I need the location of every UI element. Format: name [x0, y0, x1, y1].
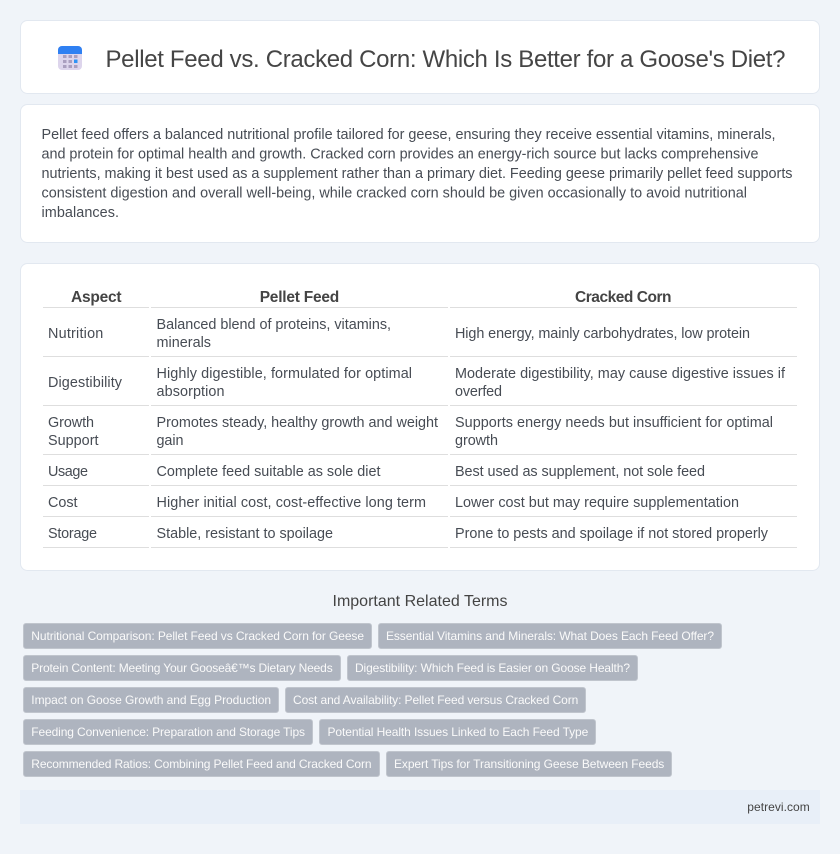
heading: important related terms: Important Related Terms — [332, 593, 508, 610]
table row: nutrition: Balanced blend of proteins, vitamins, — [156, 317, 391, 333]
tag: Impact on Goose Growth and Egg Production — [31, 693, 271, 707]
table header row: Pellet Feed — [260, 289, 339, 306]
table row: nutrition: minerals — [156, 335, 211, 351]
table row: usage: Best used as supplement, not sole feed — [455, 464, 705, 480]
panel: summary paragraph — [20, 104, 820, 242]
table row: growth support: Support — [48, 433, 98, 449]
table row: storage: Prone to pests and spoilage if not stored properly — [455, 526, 769, 542]
title: Pellet Feed vs. Cracked Corn: Which Is Better for a Goose's Diet? — [106, 46, 786, 73]
tag: Nutritional Comparison: Pellet Feed vs Cracked Corn for Geese — [31, 629, 364, 643]
tag: Cost and Availability: Pellet Feed versus Cracked Corn — [293, 693, 578, 707]
tag: Recommended Ratios: Combining Pellet Feed and Cracked Corn — [31, 757, 372, 771]
table row: usage: Complete feed suitable as sole diet — [156, 464, 380, 480]
text block: summary: imbalances. — [42, 205, 119, 221]
table row: digestibility: Moderate digestibility, may cause digestive issues if — [455, 366, 786, 382]
footer — [20, 790, 820, 824]
panel: header — [20, 20, 820, 94]
tag: Feeding Convenience: Preparation and Storage Tips — [31, 725, 305, 739]
table row: cost: Cost — [48, 495, 78, 511]
table row: cost: Lower cost but may require supplementation — [455, 495, 739, 511]
tag — [24, 720, 312, 744]
table row: growth support: Promotes steady, healthy growth and weight — [156, 415, 438, 431]
panel: related term tags — [24, 624, 722, 776]
table row: cost: Higher initial cost, cost-effective long term — [156, 495, 426, 511]
table row: storage: Stable, resistant to spoilage — [156, 526, 333, 542]
text block: summary: Pellet feed offers a balanced nutritional profile tailored for geese, ensuring they receive essential vitamins, minerals, — [42, 127, 776, 143]
tag — [24, 688, 278, 712]
table row: digestibility: overfed — [455, 384, 502, 400]
tag — [386, 752, 672, 776]
table row: usage: Usage — [48, 464, 88, 480]
tag: Digestibility: Which Feed is Easier on Goose Health? — [355, 661, 630, 675]
tag — [286, 688, 586, 712]
table row: digestibility: Highly digestible, formulated for optimal — [156, 366, 412, 382]
tag — [24, 752, 380, 776]
table row: digestibility: absorption — [156, 384, 224, 400]
table row: storage: Storage — [48, 526, 97, 542]
tag — [320, 720, 596, 744]
table row: growth support: Supports energy needs but insufficient for optimal — [455, 415, 773, 431]
text block: summary: and protein for optimal health and growth. Cracked corn provides an energy-rich source but lacks comprehensive — [42, 146, 758, 162]
table row: cost — [43, 495, 797, 517]
table row: digestibility — [43, 366, 797, 406]
table row: growth support: growth — [455, 433, 498, 449]
tag — [24, 656, 340, 680]
table row: nutrition: High energy, mainly carbohydrates, low protein — [455, 326, 750, 342]
text block: summary: consistent digestion and overall well-being, while cracked corn should be given occasionally to avoid nutritional — [42, 186, 747, 202]
tag — [24, 624, 372, 648]
table row: growth support — [43, 415, 797, 455]
text block: summary — [42, 127, 792, 221]
table header row — [43, 289, 797, 308]
icon: calendar — [58, 46, 82, 70]
table row: storage — [43, 526, 797, 548]
footer: petrevi.com — [747, 800, 810, 814]
table row: growth support: Growth — [48, 415, 94, 431]
table row: usage — [43, 464, 797, 486]
panel: comparison table — [20, 264, 820, 570]
table row: digestibility: Digestibility — [48, 375, 123, 391]
tag: Essential Vitamins and Minerals: What Does Each Feed Offer? — [386, 629, 714, 643]
table row: nutrition — [43, 317, 797, 357]
table header row: Cracked Corn — [575, 289, 672, 306]
tag: Potential Health Issues Linked to Each Feed Type — [328, 725, 589, 739]
table row: growth support: gain — [156, 433, 184, 449]
tag — [378, 624, 722, 648]
tag: Protein Content: Meeting Your Gooseâ€™s Dietary Needs — [31, 661, 333, 675]
text block: summary: nutrients, making it best used as a supplement rather than a primary diet. Feeding geese primarily pellet feed supports — [42, 166, 792, 182]
tag: Expert Tips for Transitioning Geese Between Feeds — [394, 757, 664, 771]
tag — [348, 656, 638, 680]
table header row: Aspect — [71, 289, 122, 306]
table row: nutrition: Nutrition — [48, 326, 103, 342]
